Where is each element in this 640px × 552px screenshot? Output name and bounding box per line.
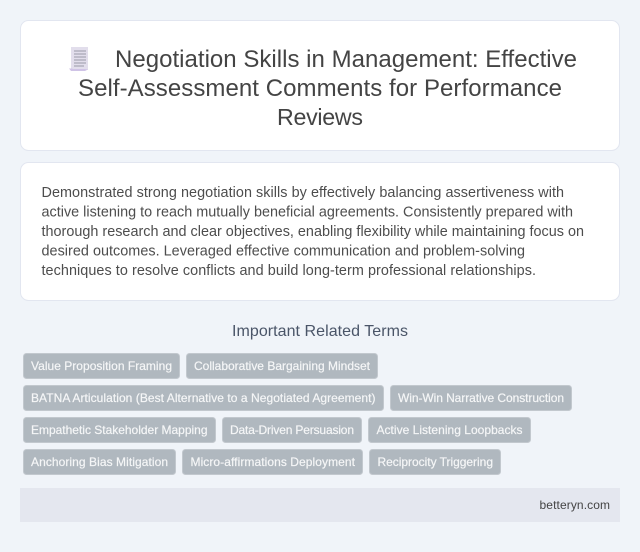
title xyxy=(78,46,577,130)
chip: active listening loopbacks xyxy=(368,418,530,442)
chip: empathetic stakeholder mapping xyxy=(24,418,216,442)
panel: term chips xyxy=(24,354,572,474)
panel: title card xyxy=(20,20,620,150)
chip: reciprocity triggering xyxy=(370,450,500,474)
chip: win-win narrative construction: Win-Win Narrative Construction xyxy=(398,391,564,405)
footer text: betteryn.com: betteryn.com xyxy=(540,498,610,512)
footer bar xyxy=(20,488,620,522)
title: Self-Assessment Comments for Performance xyxy=(78,75,562,102)
title: Negotiation Skills in Management: Effective xyxy=(115,46,577,73)
panel: summary card xyxy=(20,162,620,300)
chip: micro-affirmations deployment: Micro-affirmations Deployment xyxy=(190,455,356,469)
icon: document scroll xyxy=(69,47,88,71)
chip: win-win narrative construction xyxy=(390,386,572,410)
chip: data-driven persuasion: Data-Driven Persuasion xyxy=(230,423,354,437)
chip: active listening loopbacks: Active Listening Loopbacks xyxy=(376,423,522,437)
chip: BATNA articulation: BATNA Articulation (Best Alternative to a Negotiated Agreement) xyxy=(31,391,376,405)
text block: self-assessment summary: active listening to reach mutually beneficial agreements. Consistently prepared with xyxy=(42,204,573,220)
text block: self-assessment summary: techniques to resolve conflicts and build long-term professional relationships. xyxy=(42,263,536,279)
chip: data-driven persuasion xyxy=(222,418,362,442)
chip: collaborative bargaining mindset: Collaborative Bargaining Mindset xyxy=(194,359,371,373)
chip: anchoring bias mitigation: Anchoring Bias Mitigation xyxy=(31,455,168,469)
chip: micro-affirmations deployment xyxy=(182,450,362,474)
text block: self-assessment summary: thorough research and clear objectives, enabling flexibility while maintaining focus on xyxy=(42,224,584,240)
chip: reciprocity triggering: Reciprocity Triggering xyxy=(378,455,493,469)
chip: collaborative bargaining mindset xyxy=(186,354,378,378)
text block: self-assessment summary xyxy=(42,185,584,279)
title: Reviews xyxy=(277,104,363,130)
text block: self-assessment summary: Demonstrated strong negotiation skills by effectively balancing assertiveness with xyxy=(42,185,564,201)
text block: self-assessment summary: desired outcomes. Leveraged effective communication and problem-solving xyxy=(42,244,525,260)
chip: value proposition framing: Value Proposition Framing xyxy=(31,359,172,373)
chip: BATNA articulation xyxy=(24,386,384,410)
chip: empathetic stakeholder mapping: Empathetic Stakeholder Mapping xyxy=(31,423,208,437)
chip: anchoring bias mitigation xyxy=(24,450,176,474)
chip: value proposition framing xyxy=(24,354,180,378)
heading: important related terms: Important Related Terms xyxy=(232,323,408,340)
